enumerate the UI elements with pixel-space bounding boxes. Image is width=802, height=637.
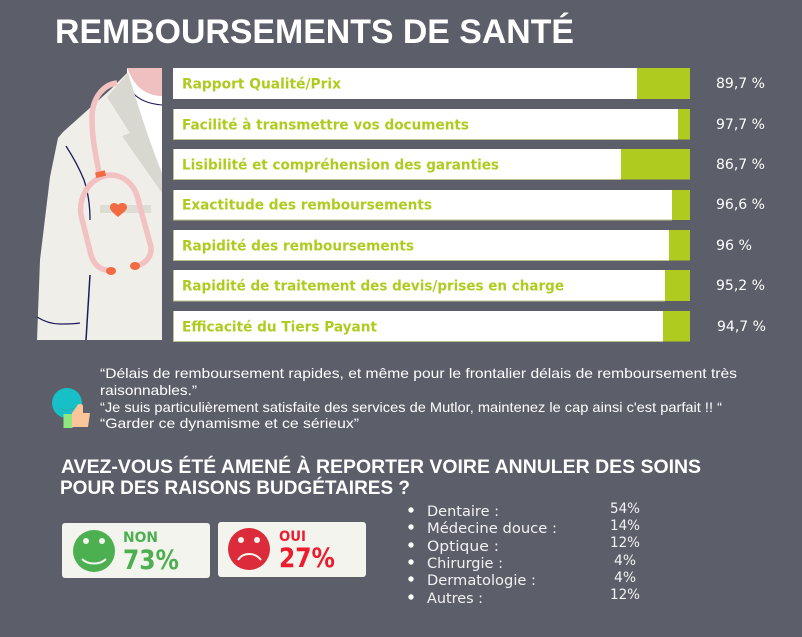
icon: satisfied customer thumbs up xyxy=(52,388,90,428)
list: postponed care categories: Dentaire : xyxy=(427,504,499,520)
question heading xyxy=(60,455,701,499)
bar: Rapidité de traitement des devis/prises en charge: 95,2 % xyxy=(716,278,765,294)
bar: Facilité à transmettre vos documents: Facilité à transmettre vos documents xyxy=(182,118,469,134)
list: postponed care categories: 12% xyxy=(610,535,640,551)
list: postponed care categories: 54% xyxy=(610,501,640,517)
card: NON 73%: 73% xyxy=(123,545,179,576)
bar: Efficacité du Tiers Payant: Efficacité du Tiers Payant xyxy=(182,320,377,336)
bar: Rapport Qualité/Prix: Rapport Qualité/Prix xyxy=(182,76,341,92)
bar: Exactitude des remboursements: Exactitude des remboursements xyxy=(182,198,432,214)
card: NON 73%: NON xyxy=(123,530,158,546)
list: postponed care categories: Autres : xyxy=(427,591,483,607)
bar: Efficacité du Tiers Payant xyxy=(173,311,766,342)
list: postponed care categories: 14% xyxy=(610,518,640,534)
customer quotes: “Délais de remboursement rapides, et même pour le frontalier délais de remboursement très xyxy=(100,365,737,381)
bar: Efficacité du Tiers Payant: 94,7 % xyxy=(717,319,766,335)
bar: Facilité à transmettre vos documents xyxy=(173,109,765,140)
question heading: POUR DES RAISONS BUDGÉTAIRES ? xyxy=(60,476,410,499)
customer quotes xyxy=(100,365,737,431)
customer quotes: raisonnables.” xyxy=(100,382,197,398)
list: postponed care categories: 4% xyxy=(614,553,636,569)
title: REMBOURSEMENTS DE SANTÉ xyxy=(55,11,574,51)
card: OUI 27% xyxy=(218,522,366,577)
customer quotes: “Je suis particulièrement satisfaite des services de Mutlor, maintenez le cap ainsi c'est parfait !! “ xyxy=(100,399,722,415)
bar: Exactitude des remboursements: 96,6 % xyxy=(716,197,765,213)
bar: Rapidité de traitement des devis/prises en charge xyxy=(173,270,765,301)
bar: Lisibilité et compréhension des garanties: 86,7 % xyxy=(716,157,765,173)
card: OUI 27%: OUI xyxy=(279,529,306,545)
bar: Lisibilité et compréhension des garanties xyxy=(173,149,765,180)
icon: smiling face xyxy=(73,530,115,572)
list: postponed care categories: Médecine douce : xyxy=(427,521,557,537)
list: postponed care categories: Optique : xyxy=(427,539,499,555)
bar: Rapidité des remboursements: Rapidité des remboursements xyxy=(182,238,414,254)
list: postponed care categories: 4% xyxy=(614,570,636,586)
list: postponed care categories xyxy=(408,501,640,607)
icon: sad face xyxy=(228,528,270,570)
bar: Lisibilité et compréhension des garanties: Lisibilité et compréhension des garanties xyxy=(182,158,499,174)
list: postponed care categories: Dermatologie : xyxy=(427,573,536,589)
bar: Rapport Qualité/Prix: 89,7 % xyxy=(716,76,765,92)
bar: Rapport Qualité/Prix xyxy=(173,68,765,99)
card: NON 73% xyxy=(62,523,210,578)
illustration: doctor with stethoscope xyxy=(37,68,162,340)
question heading: AVEZ-VOUS ÉTÉ AMENÉ À REPORTER VOIRE ANNULER DES SOINS xyxy=(61,455,701,478)
bar: Rapidité des remboursements xyxy=(173,230,752,260)
bar: Exactitude des remboursements xyxy=(173,190,765,220)
customer quotes: “Garder ce dynamisme et ce sérieux” xyxy=(100,415,359,431)
bar: Rapidité des remboursements: 96 % xyxy=(716,238,752,254)
list: postponed care categories: 12% xyxy=(610,587,640,603)
bar: Rapidité de traitement des devis/prises en charge: Rapidité de traitement des devis/prises en charge xyxy=(182,278,564,294)
list: postponed care categories: Chirurgie : xyxy=(427,556,503,572)
card: OUI 27%: 27% xyxy=(279,543,335,574)
bar: Facilité à transmettre vos documents: 97,7 % xyxy=(716,117,765,133)
